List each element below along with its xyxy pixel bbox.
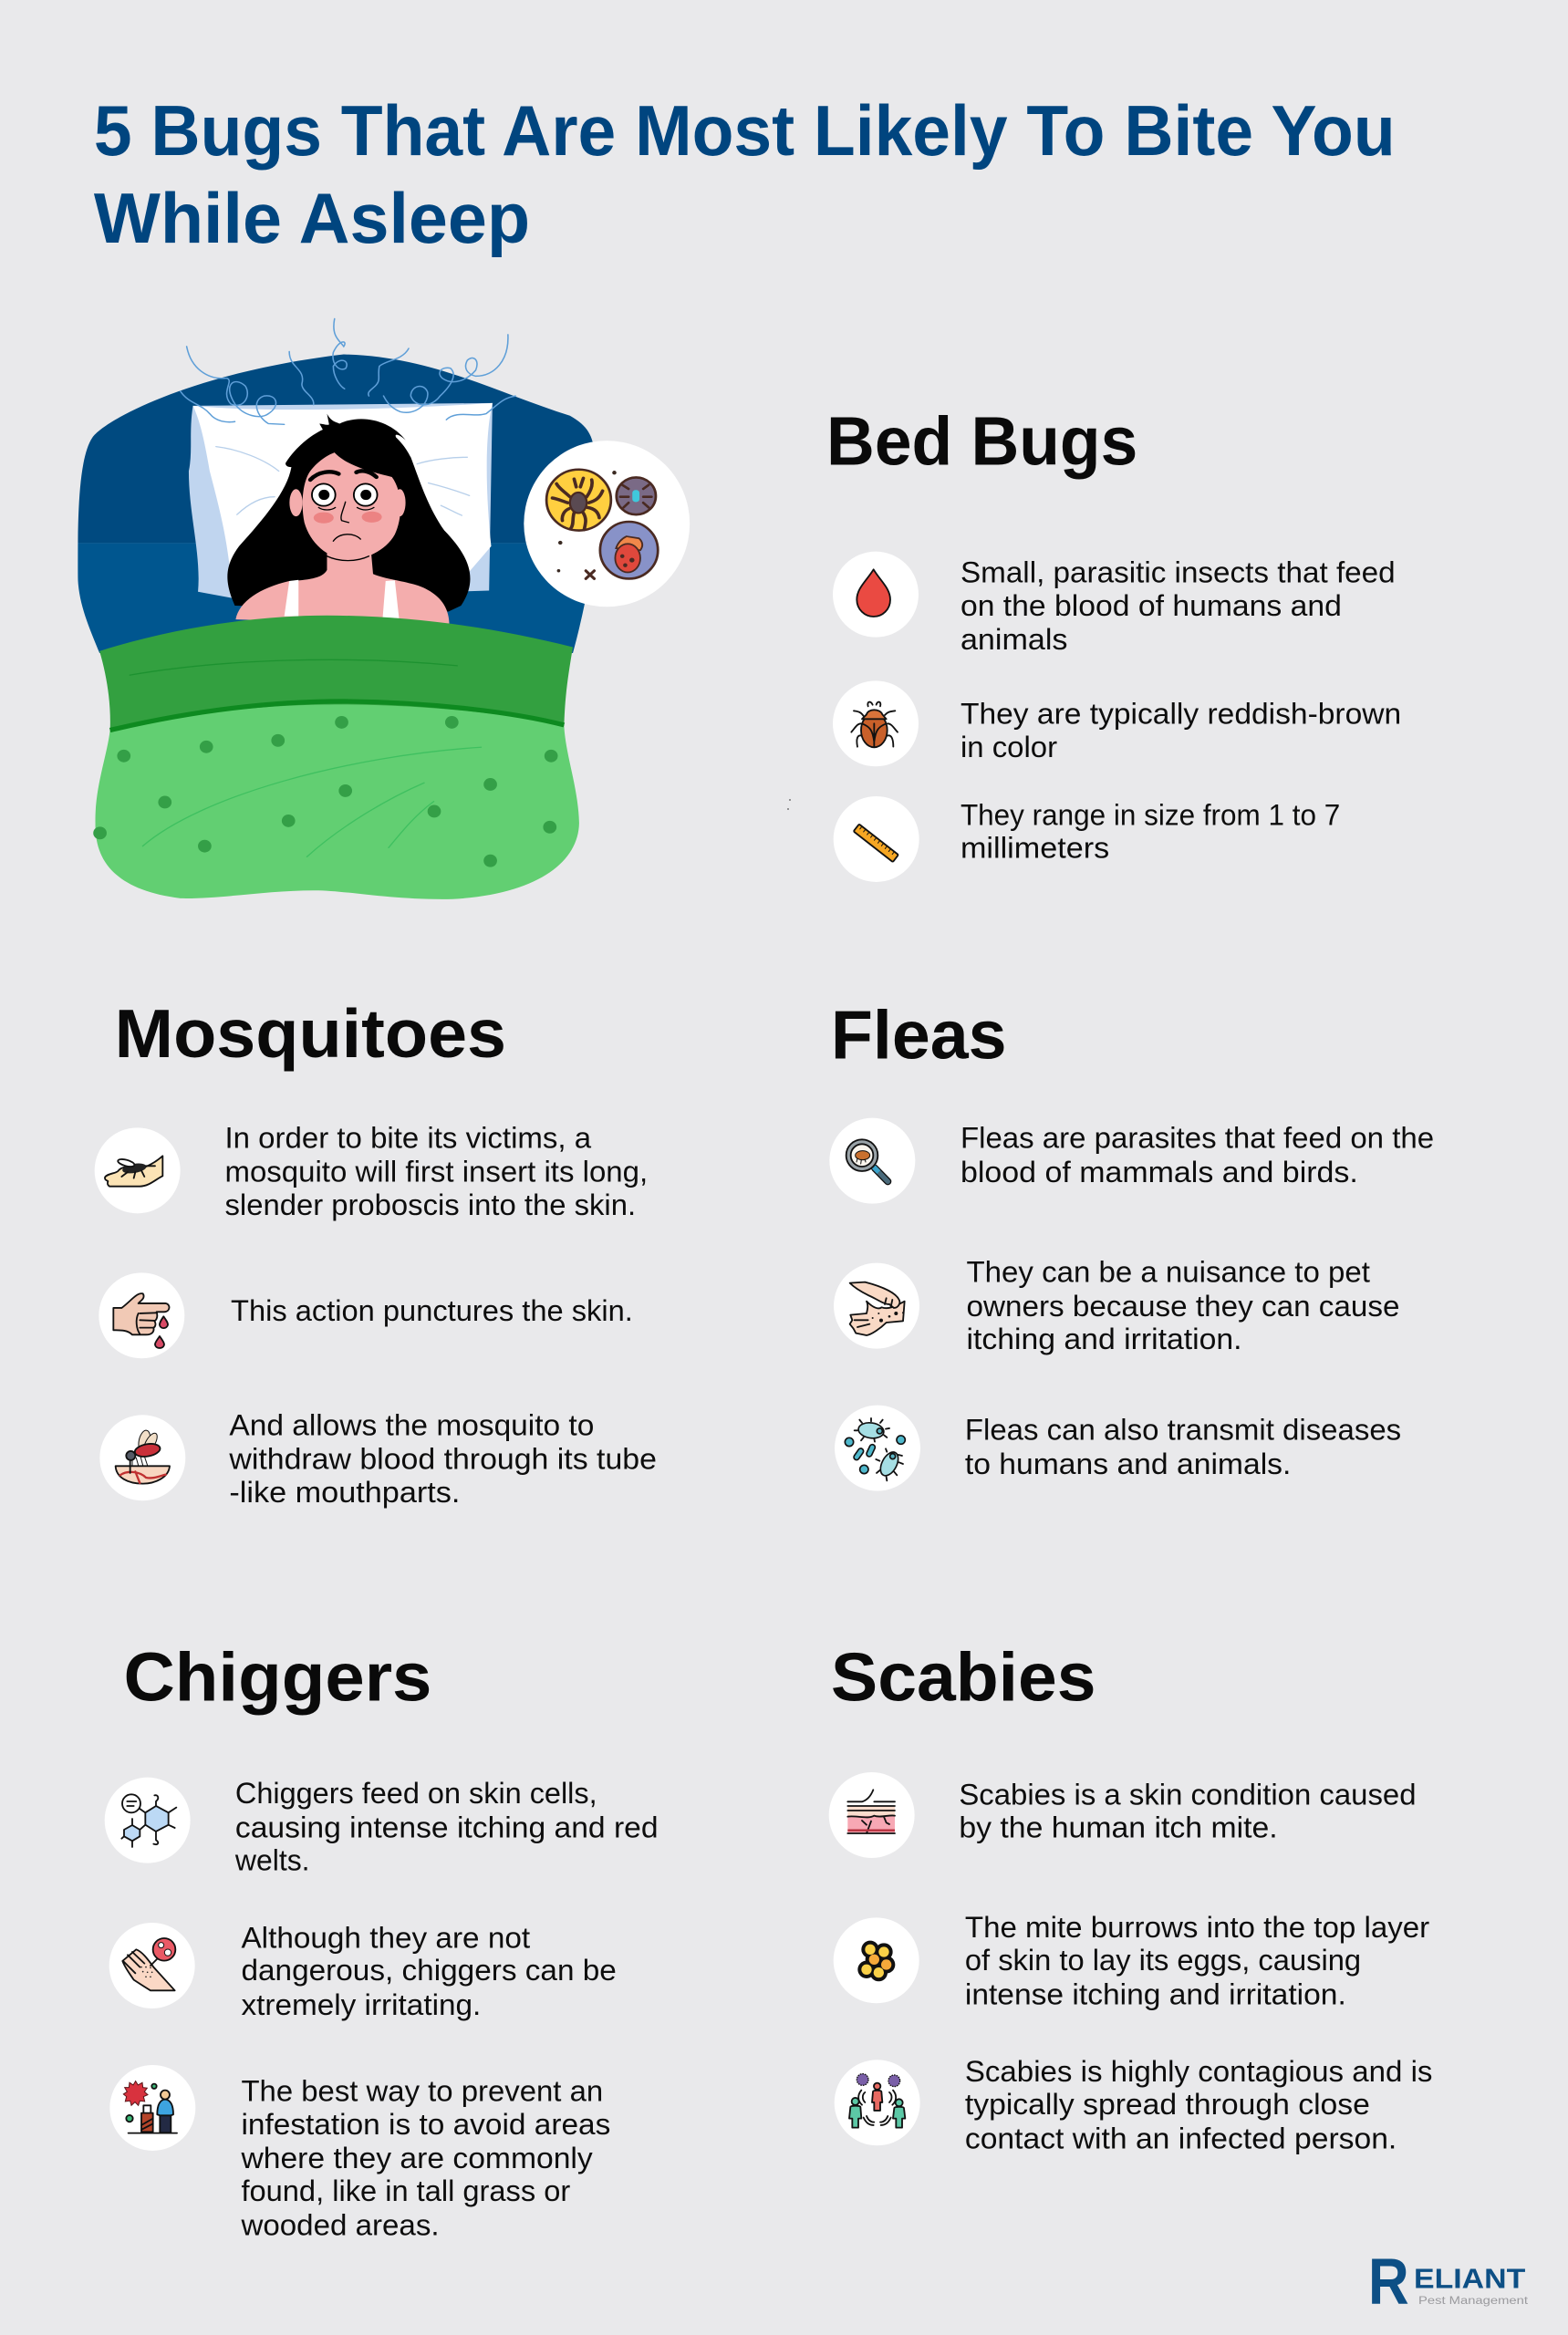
text: scabies facts: of skin to lay its eggs, causing (965, 1943, 1361, 1977)
headboard (78, 354, 593, 653)
panel: fleas (829, 997, 1434, 1491)
heading: bed bugs: Bed Bugs (826, 402, 1137, 479)
text: chigger facts: where they are commonly (240, 2141, 593, 2174)
text: bed bugs facts: in color (961, 730, 1057, 763)
text: bed bugs facts: millimeters (961, 830, 1109, 864)
text: chigger facts: infestation is to avoid areas (241, 2107, 610, 2141)
heading: scabies: Scabies (831, 1638, 1096, 1715)
icons: bed bugs (833, 552, 919, 882)
text: scabies facts: Scabies is a skin condition caused (959, 1778, 1417, 1811)
text: bed bugs facts: animals (961, 622, 1068, 656)
logo: Reliant Pest Management (1368, 2246, 1529, 2319)
panel: scabies (829, 1638, 1432, 2155)
title: 5 Bugs That Are Most Likely To Bite You (94, 90, 1396, 171)
text: mosquito facts: In order to bite its victims, a (225, 1121, 592, 1155)
text: chigger facts: xtremely irritating. (241, 1987, 481, 2021)
text: chigger facts: causing intense itching and red (235, 1811, 659, 1844)
text: mosquito facts: withdraw blood through its tube (228, 1441, 657, 1475)
text: flea facts: to humans and animals. (965, 1447, 1291, 1480)
text: flea facts (961, 1121, 1434, 1480)
logo: Reliant Pest Management: ELIANT (1414, 2263, 1526, 2294)
text: mosquito facts: mosquito will first insert its long, (225, 1154, 648, 1188)
text: scabies facts: by the human itch mite. (959, 1811, 1278, 1844)
text: flea facts: blood of mammals and birds. (961, 1155, 1358, 1188)
title (94, 90, 1396, 258)
text: chigger facts: welts. (234, 1842, 310, 1876)
logo: Reliant Pest Management: Pest Management (1418, 2294, 1529, 2307)
heading: fleas: Fleas (831, 997, 1007, 1074)
icons: mosquitoes (95, 1127, 185, 1500)
heading: mosquitoes: Mosquitoes (115, 995, 506, 1072)
pillow (189, 403, 493, 598)
bug bubble (524, 441, 690, 607)
blanket (93, 616, 579, 899)
text: flea facts: itching and irritation. (966, 1322, 1242, 1355)
text: bed bugs facts: They are typically reddish-brown (961, 696, 1401, 730)
text: mosquito facts: And allows the mosquito to (229, 1408, 594, 1442)
icons: fleas (829, 1118, 920, 1491)
text: mosquito facts (225, 1121, 657, 1509)
text: mosquito facts: This action punctures the skin. (231, 1293, 633, 1327)
text: chigger facts: Although they are not (241, 1920, 530, 1954)
icons: chiggers (105, 1778, 195, 2151)
illustration: woman awake in bed (55, 319, 690, 899)
text: scabies facts: intense itching and irritation. (965, 1977, 1346, 2010)
text: scabies facts: contact with an infected person. (965, 2122, 1397, 2155)
text: mosquito facts: slender proboscis into the skin. (225, 1188, 636, 1221)
text: flea facts: Fleas can also transmit diseases (965, 1413, 1401, 1447)
text: scabies facts: Scabies is highly contagious and is (965, 2054, 1432, 2088)
panel: bed bugs (826, 402, 1401, 882)
text: bed bugs facts (961, 555, 1401, 864)
icons: scabies (829, 1772, 920, 2145)
text: flea facts: They can be a nuisance to pet (966, 1255, 1370, 1289)
text: flea facts: owners because they can cause (966, 1289, 1400, 1323)
title: While Asleep (94, 178, 530, 258)
text: mosquito facts: -like mouthparts. (229, 1475, 460, 1509)
stray specks (787, 799, 791, 810)
text: scabies facts: The mite burrows into the top layer (965, 1910, 1429, 1944)
panel: mosquitoes (95, 995, 657, 1509)
text: chigger facts: found, like in tall grass or (241, 2174, 570, 2207)
heading: chiggers: Chiggers (123, 1638, 431, 1715)
squiggle lines above head (181, 319, 515, 424)
text: chigger facts: dangerous, chiggers can be (241, 1953, 617, 1987)
text: chigger facts: Chiggers feed on skin cells, (235, 1776, 597, 1810)
logo: Reliant Pest Management: R (1368, 2246, 1409, 2319)
panel: chiggers (105, 1638, 659, 2241)
text: bed bugs facts: on the blood of humans and (961, 588, 1342, 622)
text: bed bugs facts: They range in size from 1 to 7 (961, 797, 1340, 831)
text: scabies facts: typically spread through close (965, 2087, 1370, 2121)
text: bed bugs facts: Small, parasitic insects that feed (961, 555, 1396, 588)
text: chigger facts (234, 1776, 659, 2241)
text: scabies facts (959, 1778, 1432, 2155)
woman (227, 414, 470, 626)
text: flea facts: Fleas are parasites that feed on the (961, 1121, 1434, 1155)
text: chigger facts: wooded areas. (240, 2207, 440, 2241)
text: chigger facts: The best way to prevent an (241, 2073, 603, 2107)
